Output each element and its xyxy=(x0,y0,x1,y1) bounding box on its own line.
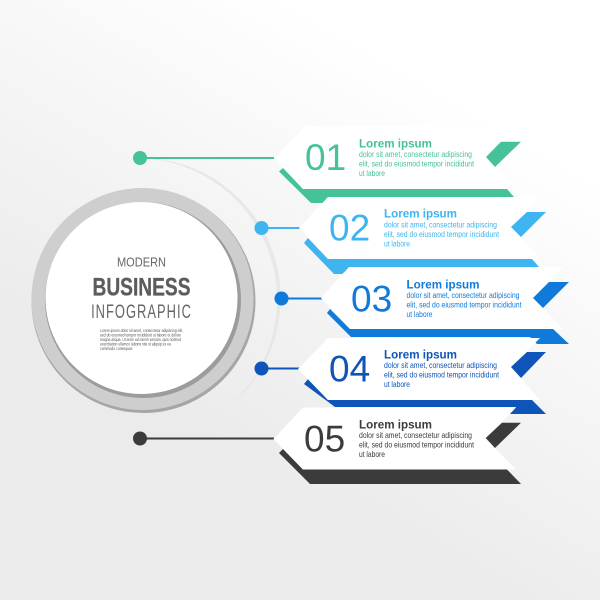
connector 02 xyxy=(254,221,300,235)
text 03: elit, sed do eiusmod tempor incididunt xyxy=(406,299,522,309)
arrow card 04 xyxy=(298,338,540,400)
connector 05 xyxy=(133,432,274,446)
panel: item 03 xyxy=(274,267,569,344)
text 02 xyxy=(384,209,499,248)
text 05: ut labore xyxy=(359,449,385,459)
text 04: dolor sit amet, consectetur adipiscing xyxy=(384,360,497,370)
text 02: Lorem ipsum xyxy=(384,209,457,221)
heading: business: BUSINESS xyxy=(92,274,190,302)
accent 05 xyxy=(486,423,521,448)
connector 01 xyxy=(133,151,274,165)
circle body text: magna aliqua. Ut enim ad minim veniam, quis nostrud xyxy=(100,337,182,342)
arrow card 03 xyxy=(321,267,563,329)
text 02: dolor sit amet, consectetur adipiscing xyxy=(384,219,497,229)
text 05: elit, sed do eiusmod tempor incididunt xyxy=(359,439,474,449)
text 03 xyxy=(406,279,522,319)
accent 03 xyxy=(533,282,569,308)
circle body text: Lorem ipsum dolor sit amet, consectetur adipiscing elit, xyxy=(100,328,183,333)
connector 03 xyxy=(274,292,322,306)
circle body text: exercitation ullamco laboris nisi ut aliquip ex ea xyxy=(100,342,172,346)
panel: item 04 xyxy=(254,338,546,414)
text 02: elit, sed do eiusmod tempor incididunt xyxy=(384,229,499,239)
text 01 xyxy=(359,139,474,178)
white disc xyxy=(46,202,238,394)
text 04: ut labore xyxy=(384,379,410,389)
band 02 xyxy=(304,238,539,274)
panel: item 05 xyxy=(133,408,521,484)
text 03: dolor sit amet, consectetur adipiscing xyxy=(406,290,520,300)
band 03 xyxy=(327,309,569,344)
panel: item 01 xyxy=(133,126,521,203)
circle body text: sed do eiusmod tempor incididunt ut labore et dolore xyxy=(100,332,182,338)
text 01: ut labore xyxy=(359,168,385,178)
text 05: Lorem ipsum xyxy=(359,419,432,431)
accent 01 xyxy=(486,142,521,167)
accent 02 xyxy=(511,212,546,237)
decorative arc behind the circle xyxy=(141,158,281,409)
band 04 xyxy=(304,379,546,414)
text 01: elit, sed do eiusmod tempor incididunt xyxy=(359,158,474,168)
band 05 xyxy=(279,449,521,484)
arrow card 02 xyxy=(299,197,540,259)
text 05 xyxy=(359,419,474,459)
number 01: 01 xyxy=(305,137,346,178)
arrow card 05 xyxy=(274,408,516,470)
arrow card 01 xyxy=(275,126,521,189)
number 04: 04 xyxy=(329,349,370,390)
connector 04 xyxy=(254,362,300,376)
text 03: ut labore xyxy=(406,309,433,319)
circle body text: commodo consequat. xyxy=(100,346,133,351)
text 03: Lorem ipsum xyxy=(406,279,480,291)
number 05: 05 xyxy=(304,419,345,460)
text 04: elit, sed do eiusmod tempor incididunt xyxy=(384,370,499,380)
heading: modern: MODERN xyxy=(117,256,166,270)
circle body text xyxy=(100,328,183,351)
text 01: Lorem ipsum xyxy=(359,139,432,151)
number 02: 02 xyxy=(329,208,370,249)
outer circle shadow xyxy=(32,189,256,413)
text 04 xyxy=(384,350,499,389)
accent 04 xyxy=(511,352,546,378)
inner circle shadow xyxy=(45,202,241,398)
text 02: ut labore xyxy=(384,238,410,248)
panel: central circle xyxy=(32,188,256,413)
heading: infographic: INFOGRAPHIC xyxy=(91,302,192,323)
panel: item 02 xyxy=(254,197,546,274)
text 01: dolor sit amet, consectetur adipiscing xyxy=(359,149,472,159)
grey ring xyxy=(32,188,254,410)
number 03: 03 xyxy=(351,279,392,320)
band 01 xyxy=(279,168,514,203)
text 05: dolor sit amet, consectetur adipiscing xyxy=(359,430,472,440)
text 04: Lorem ipsum xyxy=(384,350,457,362)
